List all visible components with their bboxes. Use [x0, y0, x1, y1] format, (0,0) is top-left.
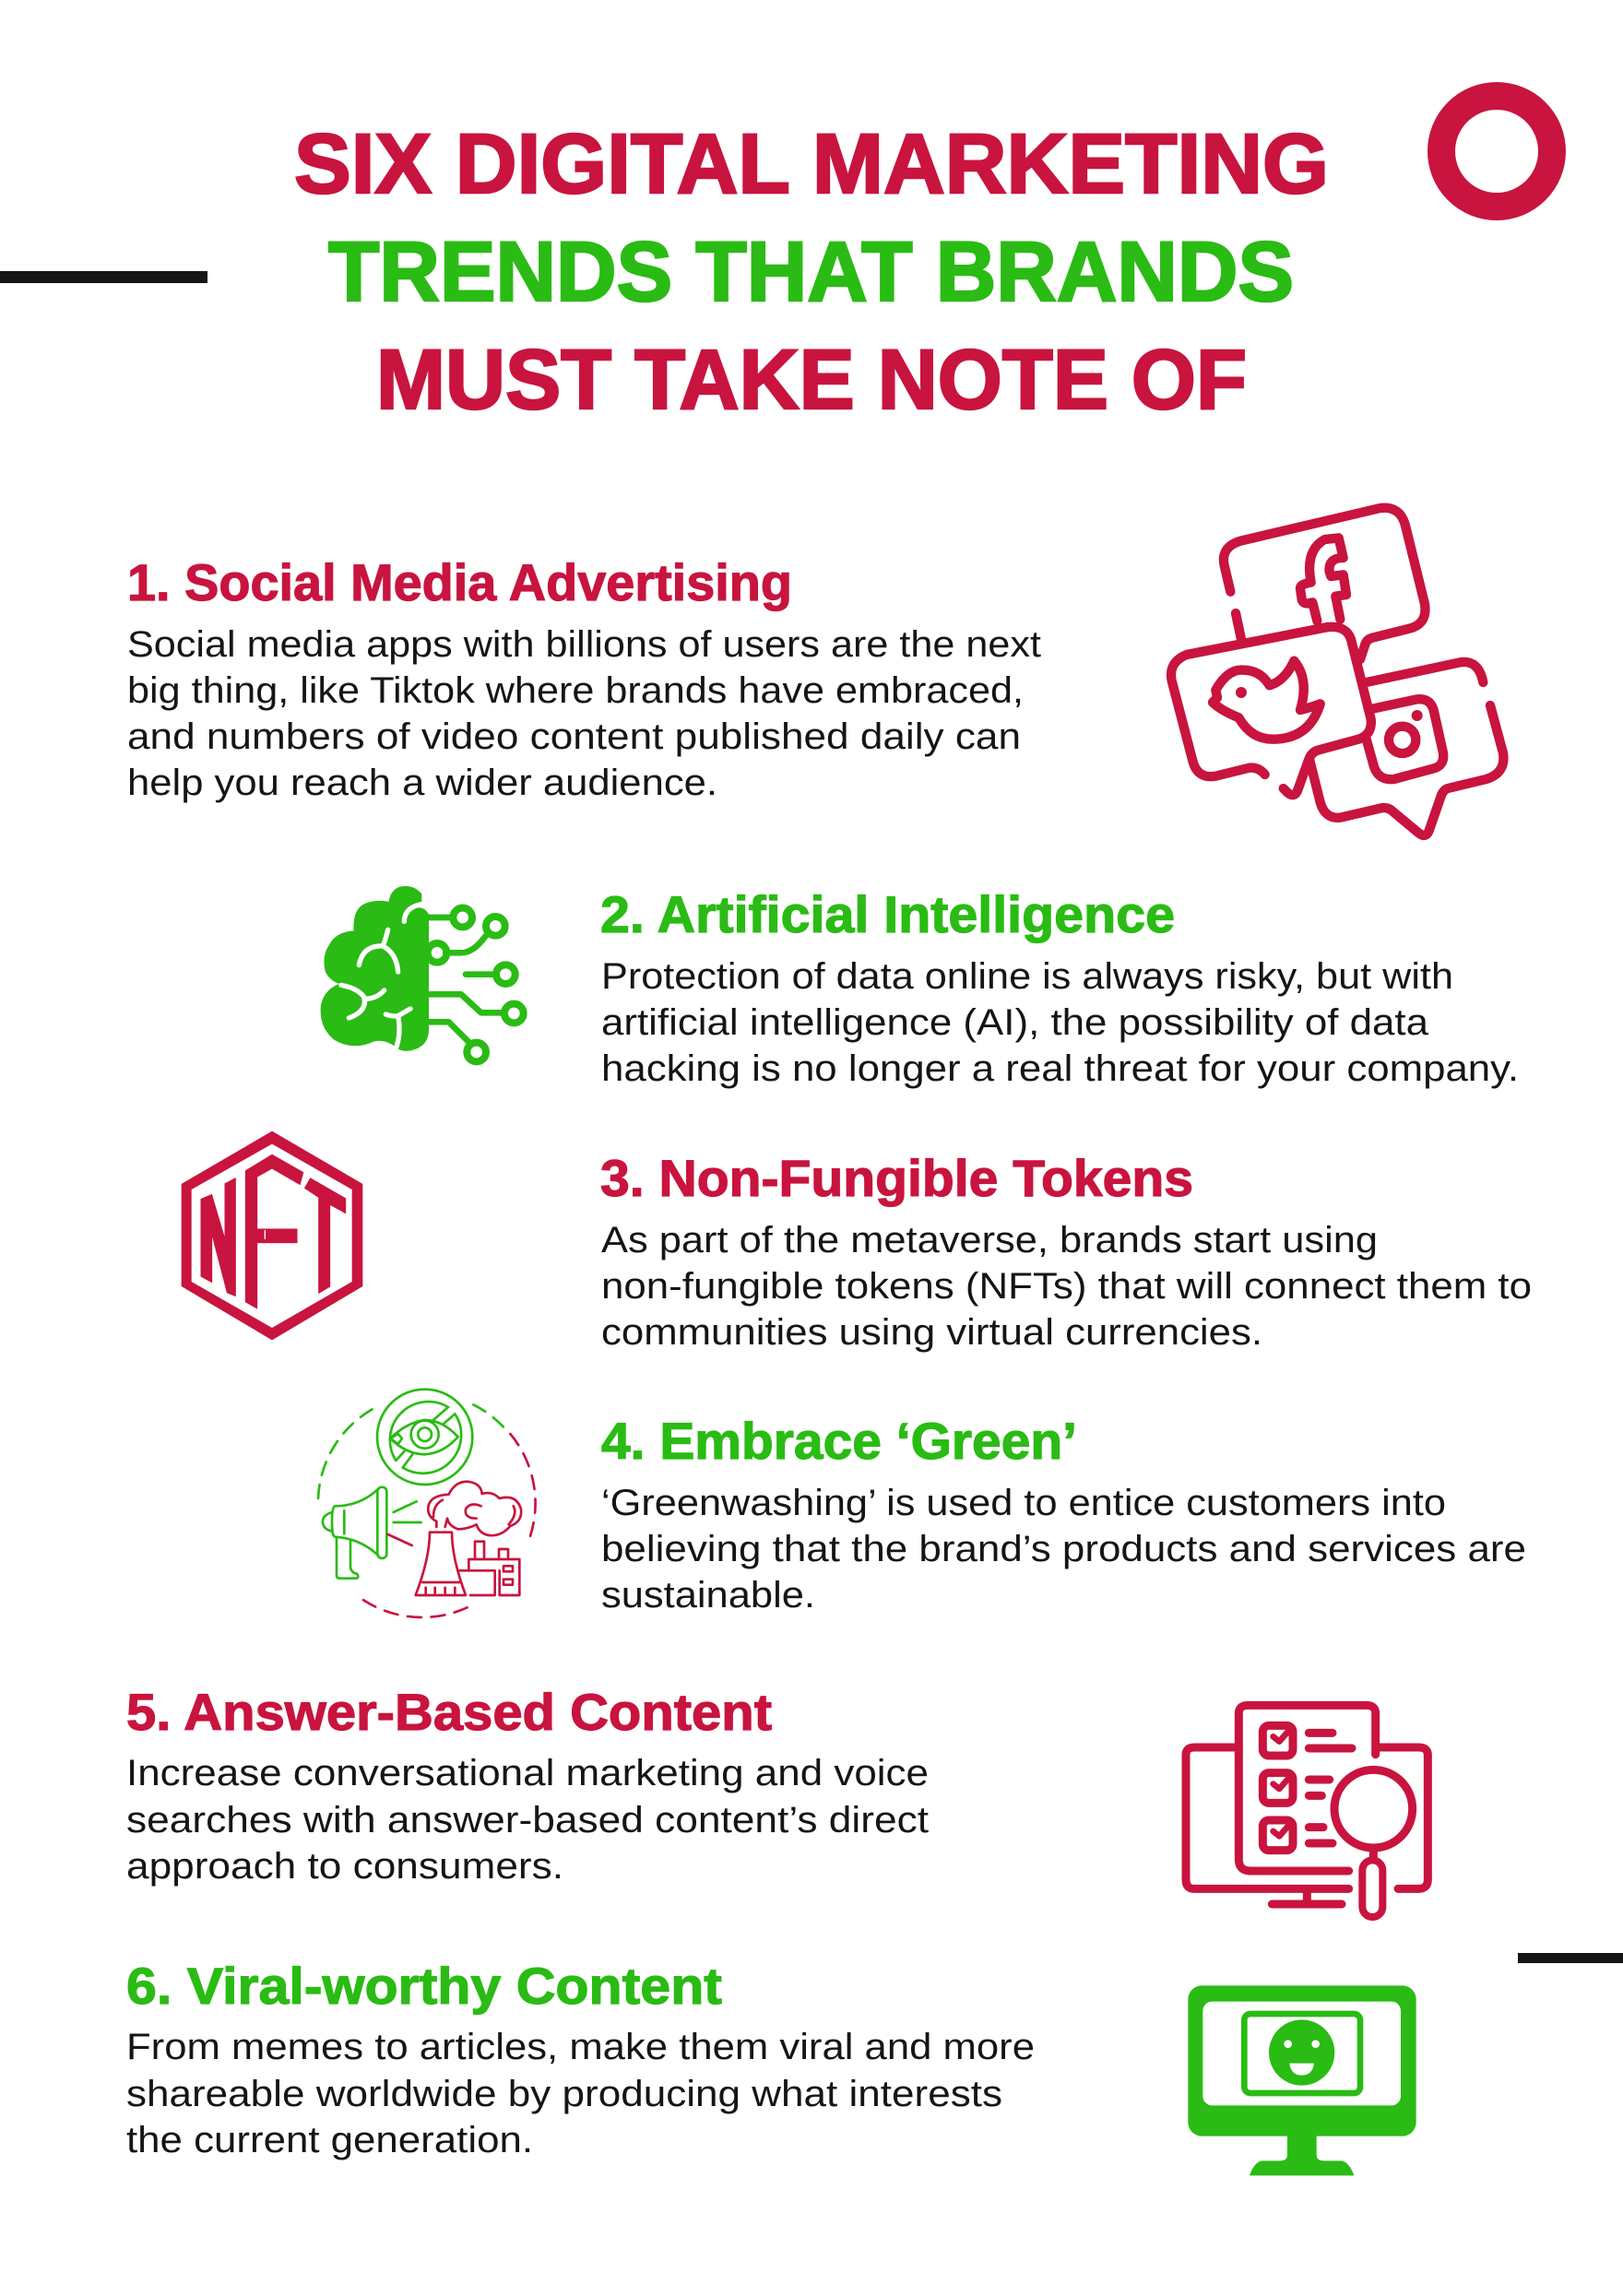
title: TRENDS THAT BRANDS — [328, 225, 1294, 319]
body text 2 — [601, 956, 1519, 1089]
body text 2: Protection of data online is always risky, but with — [601, 956, 1453, 997]
body text 3 — [601, 1220, 1532, 1353]
icon: NFT hexagon — [182, 1131, 362, 1340]
body text 1 — [127, 624, 1041, 803]
panel: viral-worthy content — [126, 1957, 1416, 2175]
left accent bar — [0, 271, 207, 283]
body text 4: sustainable. — [601, 1575, 815, 1615]
body text 1: help you reach a wider audience. — [127, 763, 717, 803]
icon: checklist and magnifier — [1186, 1705, 1428, 1917]
body text 2: artificial intelligence (AI), the possibility of data — [601, 1002, 1429, 1043]
body text 5: Increase conversational marketing and voice — [126, 1753, 929, 1793]
body text 5: searches with answer-based content’s direct — [126, 1800, 929, 1840]
body text 4: ‘Greenwashing’ is used to entice customers into — [601, 1483, 1446, 1523]
decorative ring — [1441, 96, 1552, 207]
heading 5: 5. Answer-Based Content — [126, 1683, 772, 1741]
body text 6 — [126, 2027, 1035, 2160]
title: MUST TAKE NOTE OF — [376, 333, 1247, 427]
panel: artificial intelligence — [322, 885, 1519, 1089]
heading 1: 1. Social Media Advertising — [127, 553, 792, 611]
body text 6: shareable worldwide by producing what interests — [126, 2074, 1002, 2114]
panel: embrace green — [318, 1390, 1526, 1617]
icon: greenwashing circle — [318, 1390, 536, 1617]
body text 4 — [601, 1483, 1526, 1615]
body text 1: and numbers of video content published daily can — [127, 716, 1021, 757]
title: SIX DIGITAL MARKETING — [294, 117, 1329, 211]
body text 5 — [126, 1753, 929, 1887]
icon: AI brain — [322, 887, 524, 1061]
icon: social media bubbles — [1171, 508, 1503, 835]
body text 5: approach to consumers. — [126, 1846, 563, 1887]
panel: answer-based content — [126, 1683, 1428, 1917]
body text 6: the current generation. — [126, 2120, 533, 2160]
body text 1: big thing, like Tiktok where brands have embraced, — [127, 670, 1024, 711]
body text 2: hacking is no longer a real threat for your company. — [601, 1048, 1519, 1089]
body text 1: Social media apps with billions of users are the next — [127, 624, 1041, 665]
panel: social media advertising — [127, 508, 1503, 835]
icon: monitor with smiley — [1188, 1985, 1416, 2175]
body text 3: non-fungible tokens (NFTs) that will connect them to — [601, 1266, 1532, 1307]
body text 3: communities using virtual currencies. — [601, 1312, 1262, 1353]
heading 4: 4. Embrace ‘Green’ — [601, 1412, 1077, 1470]
right accent bar — [1518, 1953, 1623, 1963]
heading 6: 6. Viral-worthy Content — [126, 1957, 722, 2015]
heading 3: 3. Non-Fungible Tokens — [600, 1149, 1193, 1207]
body text 4: believing that the brand’s products and services are — [601, 1529, 1526, 1569]
body text 3: As part of the metaverse, brands start using — [601, 1220, 1378, 1260]
body text 6: From memes to articles, make them viral and more — [126, 2027, 1035, 2067]
heading 2: 2. Artificial Intelligence — [600, 885, 1175, 943]
panel: non-fungible tokens — [182, 1131, 1532, 1353]
title — [294, 117, 1329, 427]
